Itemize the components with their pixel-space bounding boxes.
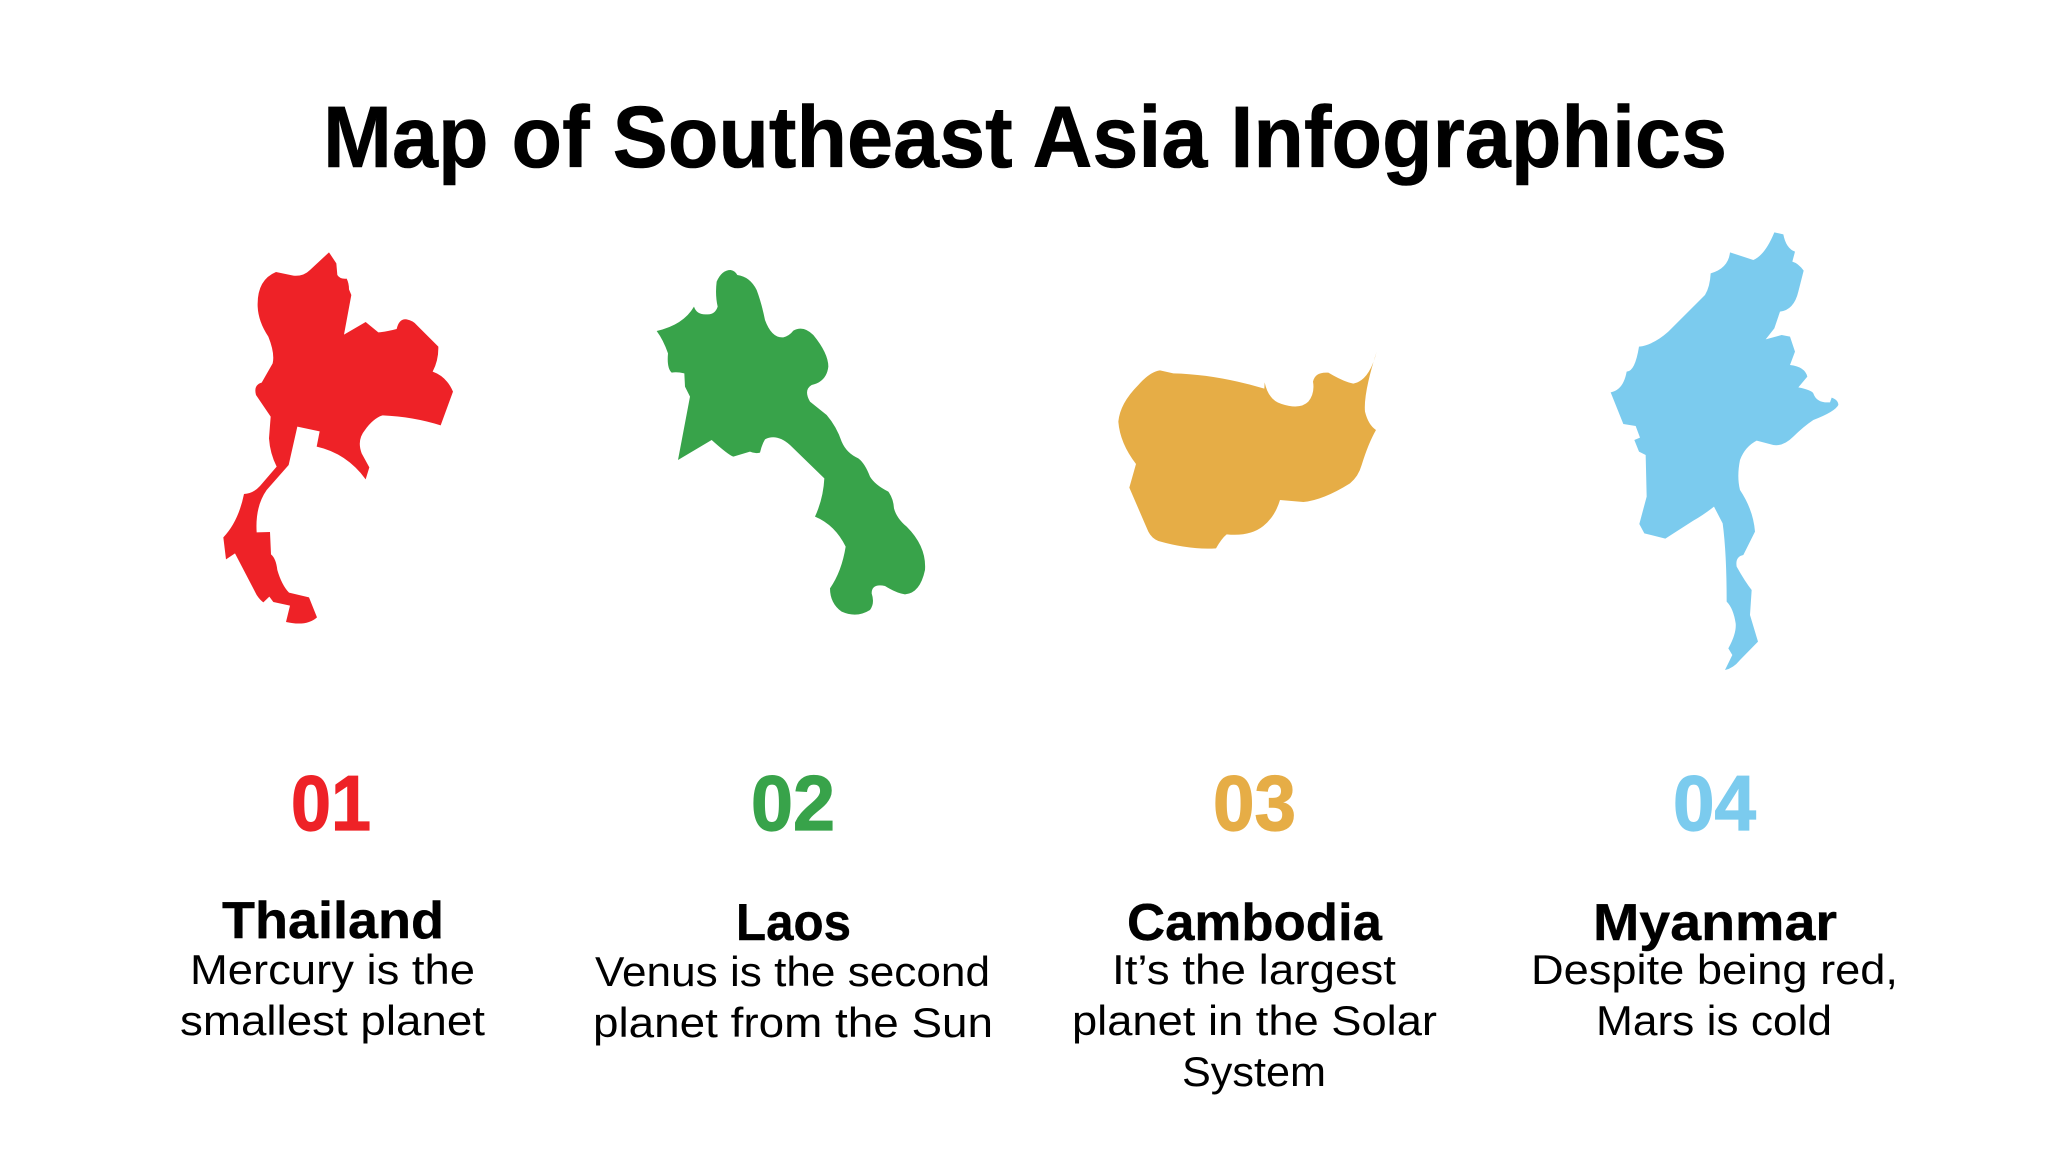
column: Cambodia (1072, 759, 1437, 1095)
title: Map of Southeast Asia Infographics (323, 89, 1727, 186)
number 03: 03 (1213, 759, 1296, 847)
map: Cambodia (1118, 352, 1377, 549)
description: Laos: Venus is the second (595, 948, 990, 995)
map: Laos (657, 270, 925, 615)
number 01: 01 (291, 759, 371, 847)
description: Cambodia: System (1182, 1048, 1326, 1095)
description: Thailand: Mercury is the (190, 946, 475, 993)
description: Thailand (180, 946, 485, 1044)
description: Myanmar (1531, 946, 1898, 1044)
description: Laos: planet from the Sun (593, 999, 993, 1046)
column: Laos (593, 759, 993, 1046)
description: Cambodia: It’s the largest (1112, 946, 1396, 993)
description: Cambodia: planet in the Solar (1072, 997, 1437, 1044)
description: Laos (593, 948, 993, 1046)
map: Myanmar (1611, 232, 1838, 670)
description: Thailand: smallest planet (180, 997, 485, 1044)
heading: Laos: Laos (736, 894, 851, 952)
map: Thailand (223, 252, 453, 624)
description: Myanmar: Mars is cold (1596, 997, 1832, 1044)
description: Cambodia (1072, 946, 1437, 1095)
heading: Myanmar: Myanmar (1593, 894, 1837, 952)
heading: Cambodia: Cambodia (1127, 894, 1383, 952)
description: Myanmar: Despite being red, (1531, 946, 1898, 993)
heading: Thailand: Thailand (222, 892, 444, 950)
column: Thailand (180, 759, 485, 1044)
number 02: 02 (751, 759, 835, 847)
column: Myanmar (1531, 759, 1898, 1044)
number 04: 04 (1673, 759, 1756, 847)
